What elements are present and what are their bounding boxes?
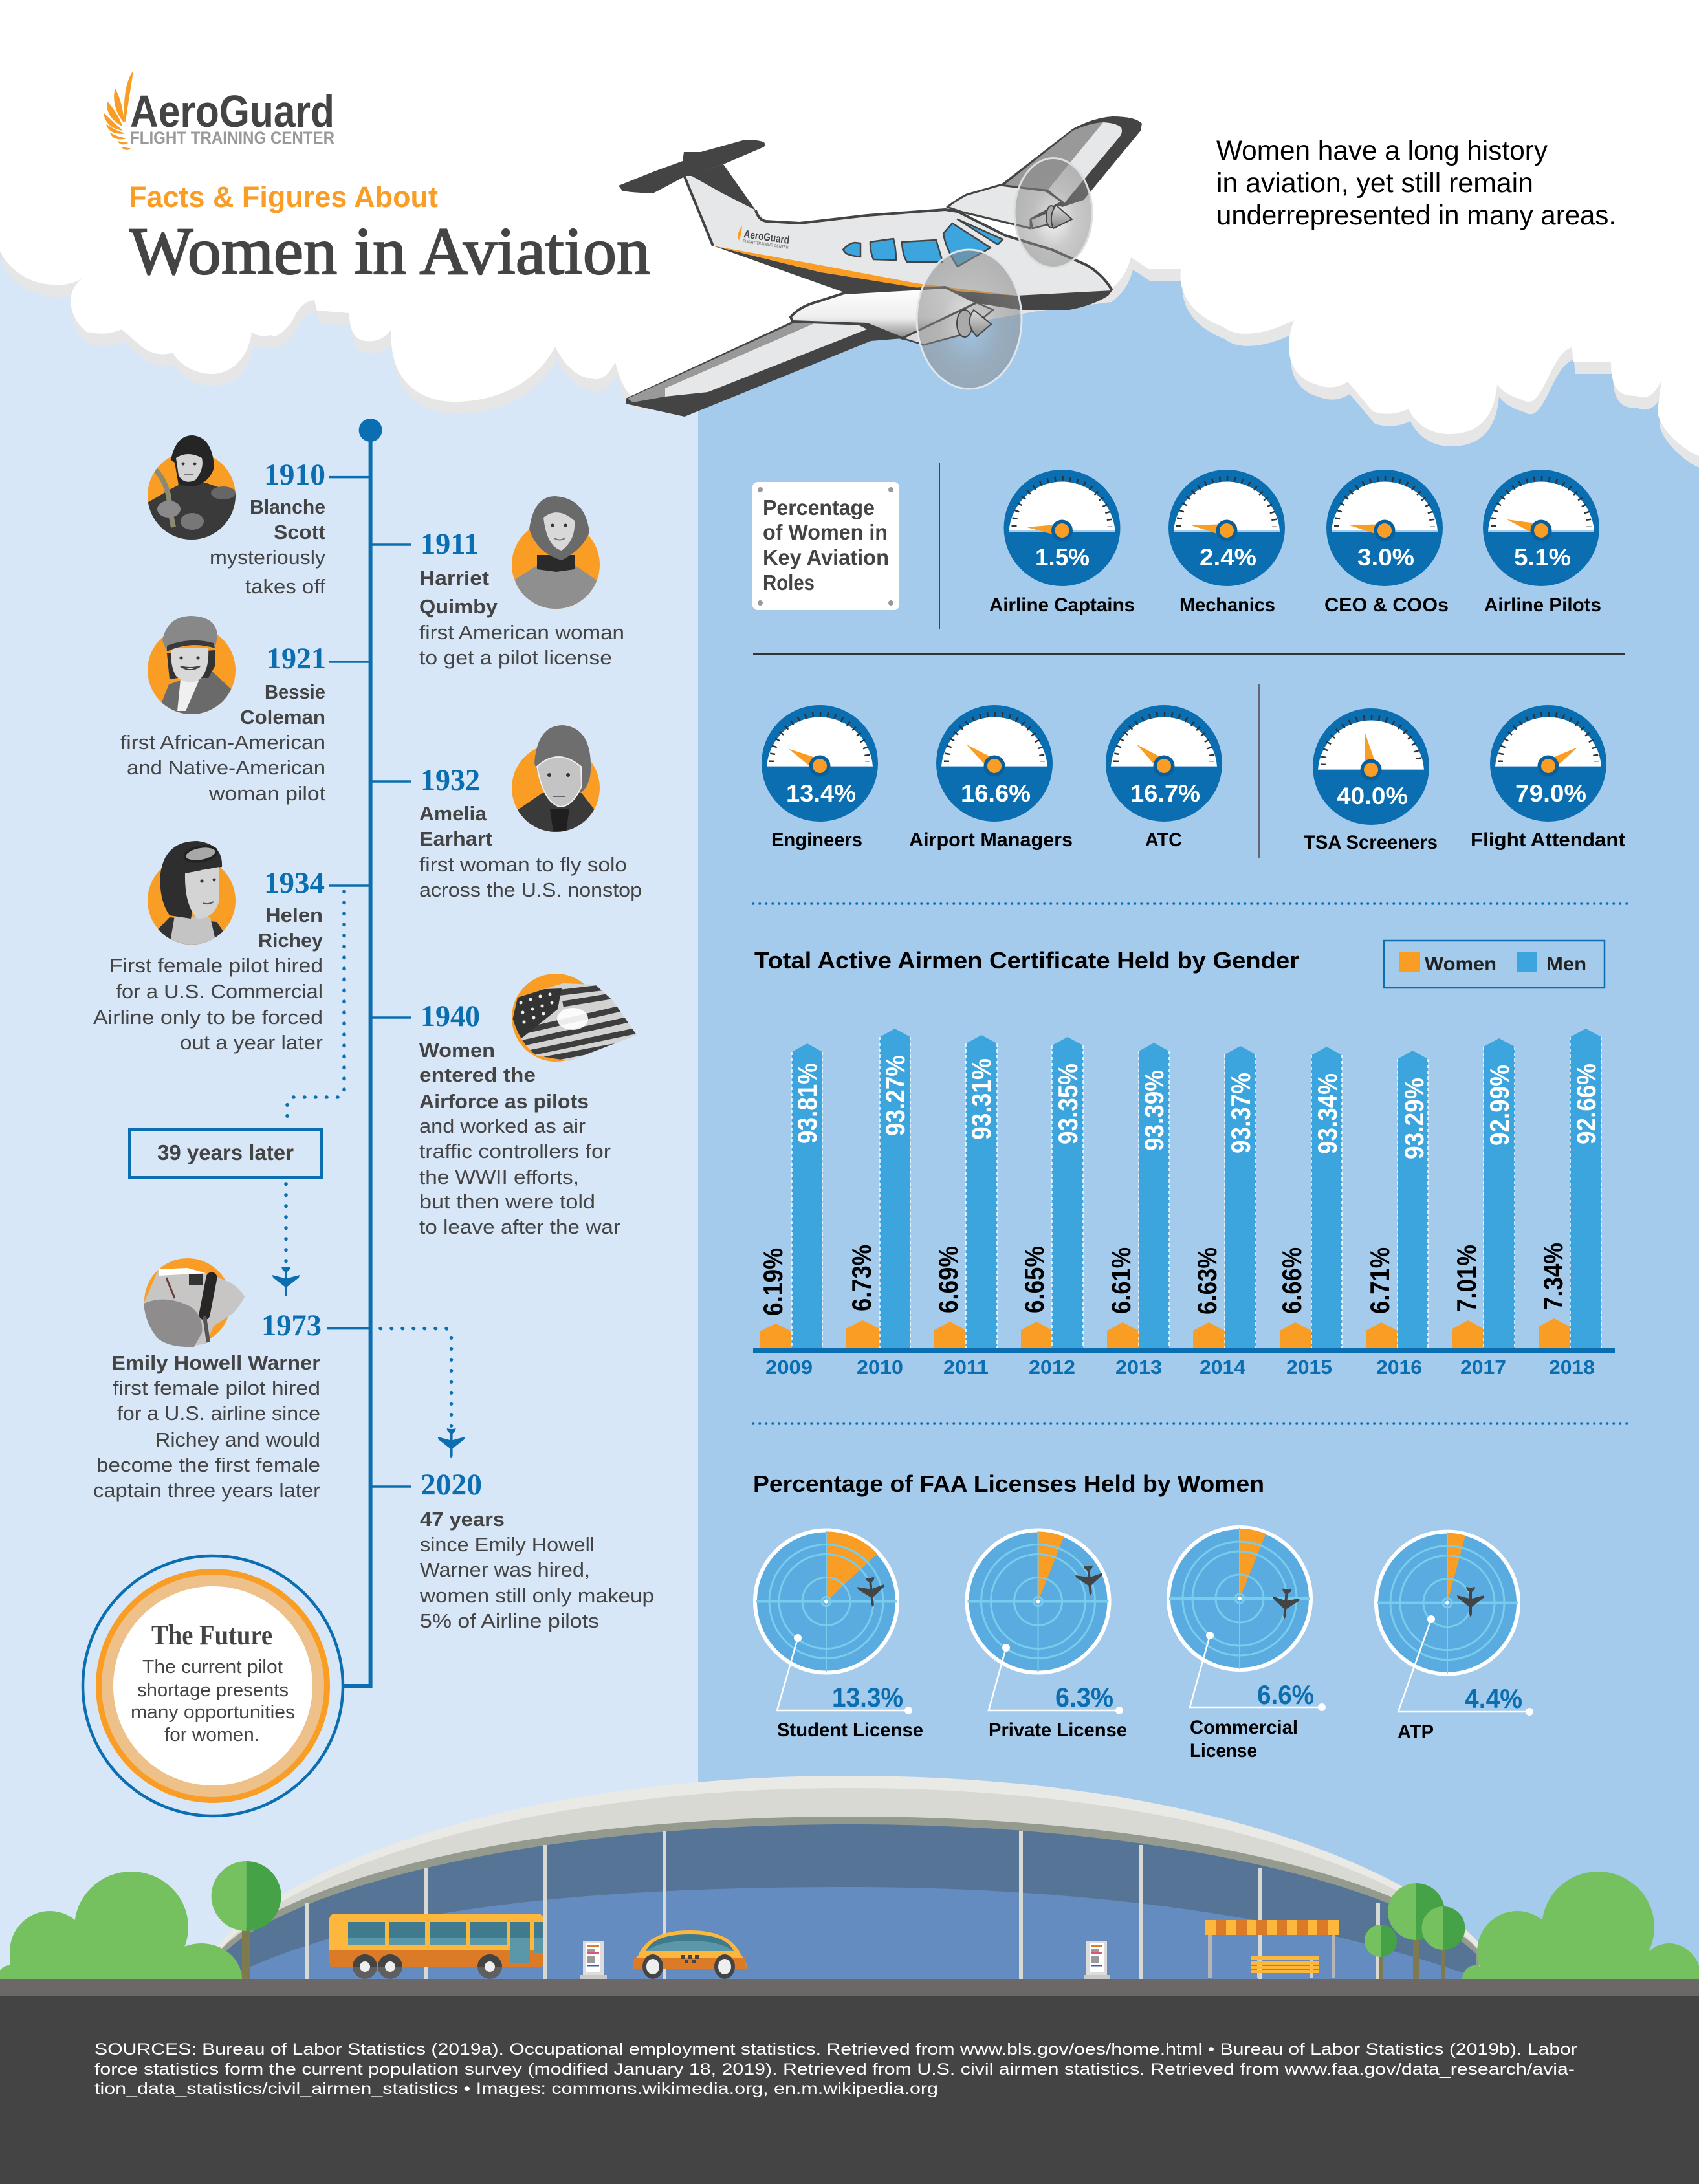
sky background: left panel (0, 0, 698, 1980)
gauge: Airline Pilots 5.1% (1483, 470, 1601, 616)
radar: Commercial License 6.6% (1168, 1527, 1326, 1762)
gauge: Engineers 13.4%: Engineers (771, 829, 862, 851)
timeline entry: 1921 Bessie Coleman: Bessie (265, 681, 325, 703)
timeline entry: 1940 Airforce: Women (419, 1039, 495, 1062)
timeline entry: 1973 Emily Howell Warner (93, 1258, 322, 1502)
bars: 2017: 92.99% (1484, 1065, 1515, 1146)
panel: percentage heading card: Roles (763, 571, 815, 595)
gauge: Mechanics 2.4% (1168, 470, 1285, 616)
timeline entry: 1940 Airforce: entered the (419, 1064, 536, 1086)
portrait: Bessie Coleman (148, 616, 236, 718)
bars: 2015: 93.34% (1312, 1073, 1343, 1154)
timeline entry: 1910 Blanche Scott: takes off (245, 575, 325, 598)
gauge: TSA Screeners 40.0%: 40.0% (1337, 783, 1408, 809)
callout: The Future (83, 1556, 343, 1816)
bars: 2014: 93.37% (1225, 1073, 1256, 1153)
timeline entry: 1973 Emily Howell Warner: Richey and would (155, 1428, 320, 1451)
bars: 2009: 6.19% (758, 1248, 788, 1316)
gauge: Flight Attendant 79.0%: Flight Attendant (1471, 829, 1625, 851)
bar chart: airmen certificates by gender (753, 1029, 1615, 1379)
bars: 2016: 2016 (1376, 1356, 1422, 1379)
icon: blue plane (272, 1267, 300, 1296)
bus stop shelter and bench (1205, 1920, 1339, 1978)
gauge: Airline Pilots 5.1%: Airline Pilots (1484, 595, 1601, 616)
radar: Student License 13.3%: Student License (777, 1720, 923, 1741)
radar: ATP 4.4%: 4.4% (1465, 1683, 1522, 1714)
cabin windows (843, 219, 1003, 267)
icon: orange wing feathers (104, 72, 133, 149)
trees and bushes: right (1365, 1872, 1699, 2016)
gauge: Mechanics 2.4%: 2.4% (1200, 544, 1256, 571)
taxi (633, 1930, 747, 1979)
fuselage outline (685, 177, 1112, 290)
bars: 2012: 6.65% (1019, 1246, 1049, 1313)
gauge: Flight Attendant 79.0% (1471, 705, 1625, 851)
airport terminal (214, 1776, 1485, 1980)
timeline entry: 1934 Helen Richey: Richey (258, 929, 323, 952)
fuselage (685, 176, 1112, 304)
timeline entry: 2020: 47 years (420, 1508, 505, 1531)
bars: 2018: 92.66% (1571, 1064, 1601, 1144)
callout: 39 years later (129, 1130, 322, 1177)
bars: 2012: 2012 (1029, 1356, 1075, 1379)
timeline connectors (327, 477, 411, 1487)
photo: American flag (508, 974, 641, 1064)
timeline entry: 2020: 2020 (421, 1468, 482, 1502)
portrait: Blanche Scott (146, 435, 237, 543)
bars: 2016: 93.29% (1399, 1078, 1429, 1159)
legend: Men (1546, 954, 1586, 975)
callout: The Future: The Future (151, 1619, 272, 1651)
timeline entry: 1932 Amelia Earhart (419, 725, 642, 901)
title: Women in Aviation (129, 214, 650, 289)
gauge: ATC 16.7% (1106, 705, 1222, 851)
callout: 39 years later: 39 years later (157, 1141, 294, 1164)
gauge: Airline Captains 1.5%: Airline Captains (989, 595, 1135, 616)
horizontal stabilizer (619, 140, 765, 193)
callout: The Future: many opportunities (131, 1702, 295, 1723)
intro text: in aviation, yet still remain (1216, 168, 1533, 199)
intro text (1216, 135, 1616, 231)
bars: 2015 (1277, 1047, 1343, 1379)
timeline entry: 1940 Airforce: to leave after the war (419, 1216, 620, 1238)
timeline entry: 1940 Airforce: and worked as air (419, 1115, 586, 1137)
timeline entry: 1934 Helen Richey: 1934 (264, 866, 325, 900)
gauge: Airport Managers 16.6%: Airport Managers (909, 829, 1073, 851)
gauge: CEO & COOs 3.0% (1324, 470, 1449, 616)
timeline entry: 2020: since Emily Howell (420, 1533, 595, 1556)
timeline entry: 2020: women still only makeup (419, 1584, 654, 1607)
bars: 2011: 6.69% (933, 1246, 963, 1313)
gauge: Airport Managers 16.6%: 16.6% (961, 780, 1031, 807)
bars: 2014: 6.63% (1192, 1247, 1222, 1315)
timeline entry: 1910 Blanche Scott: mysteriously (210, 546, 326, 569)
timeline entry: 1921 Bessie Coleman: and Native-American (127, 756, 325, 779)
bars: 2013: 6.61% (1106, 1247, 1136, 1314)
gauge: Flight Attendant 79.0%: 79.0% (1515, 780, 1586, 807)
gauge: Airport Managers 16.6% (909, 705, 1073, 851)
bars: 2018: 2018 (1549, 1356, 1595, 1379)
panel: percentage heading card: Key Aviation (763, 545, 889, 569)
timeline entry: 1934 Helen Richey (93, 841, 325, 1054)
timeline entry: 1921 Bessie Coleman: Coleman (240, 706, 325, 728)
timeline entry: 1932 Amelia Earhart: first woman to fly solo (419, 853, 627, 876)
far engine cowl (1031, 212, 1061, 228)
panel: percentage heading card (752, 482, 899, 610)
timeline entry: 1940 Airforce: 1940 (421, 999, 480, 1033)
timeline entry: 1940 Airforce: Airforce as pilots (419, 1090, 589, 1113)
panel: percentage heading card: Percentage (763, 496, 875, 519)
bars: 2009: 2009 (765, 1356, 813, 1379)
gauge: Airline Captains 1.5%: 1.5% (1035, 544, 1090, 571)
dotted path from 1934 to 39 years later (287, 891, 344, 1120)
gauge: ATC 16.7%: 16.7% (1130, 780, 1200, 807)
far engine nacelle (947, 185, 1062, 228)
timeline entry: 1910 Blanche Scott (146, 435, 326, 598)
icon: blue plane (438, 1428, 465, 1458)
gauge: CEO & COOs 3.0%: CEO & COOs (1324, 595, 1449, 616)
bars: 2009: 93.81% (792, 1063, 822, 1144)
intro text: underrepresented in many areas. (1216, 200, 1616, 231)
gauge: TSA Screeners 40.0% (1304, 708, 1438, 853)
dotted path from 1973 to 2020 (380, 1329, 452, 1427)
subtitle: Facts & Figures About (129, 180, 438, 213)
bars: 2014 (1192, 1046, 1256, 1379)
bars: 2012 (1019, 1037, 1083, 1379)
gauge: Engineers 13.4%: 13.4% (786, 780, 856, 807)
fuselage mini logo: AeroGuard (743, 228, 790, 246)
timeline entry: 1910 Blanche Scott: 1910 (264, 458, 325, 492)
bars: 2014: 2014 (1200, 1356, 1246, 1379)
bars: 2016 (1365, 1051, 1429, 1379)
timeline entry: 1934 Helen Richey: Airline only to be forced (93, 1006, 323, 1029)
radar: Commercial License 6.6%: 6.6% (1257, 1679, 1314, 1710)
legend: Women (1425, 954, 1496, 975)
timeline entry: 1932 Amelia Earhart: 1932 (421, 763, 480, 797)
far spinner (1046, 205, 1072, 228)
timeline entry: 1921 Bessie Coleman: woman pilot (208, 782, 325, 805)
bars: 2010: 6.73% (846, 1245, 877, 1311)
chart baseline (753, 1348, 1615, 1353)
dotted path down to 1973 (284, 1184, 288, 1263)
kiosk: right (1084, 1941, 1110, 1979)
fuselage orange stripe (713, 246, 1016, 296)
timeline entry: 2020: 5% of Airline pilots (420, 1610, 599, 1632)
timeline entry: 1973 Emily Howell Warner: Emily Howell Warner (111, 1351, 320, 1374)
timeline entry: 1911 Harriet Quimby: Harriet (419, 567, 489, 589)
gauge: ATC 16.7%: ATC (1145, 829, 1182, 851)
timeline entry: 1932 Amelia Earhart: Earhart (419, 827, 492, 850)
bars: 2011 (933, 1035, 997, 1379)
radar: Student License 13.3% (755, 1531, 923, 1741)
gauge: Mechanics 2.4%: Mechanics (1179, 595, 1275, 616)
timeline entry: 1910 Blanche Scott: Scott (274, 521, 325, 543)
footer band (0, 1996, 1699, 2184)
intro text: Women have a long history (1216, 135, 1548, 166)
ground road strip (0, 1979, 1699, 1996)
gauge: TSA Screeners 40.0%: TSA Screeners (1304, 832, 1438, 853)
radar: ATP 4.4%: ATP (1398, 1721, 1434, 1743)
bus (329, 1914, 543, 1979)
sources text: tion_data_statistics/civil_airmen_statistics • Images: commons.wikimedia.org, en.m.wikipedia.org (94, 2080, 938, 2098)
near wing (626, 322, 903, 417)
radar: Private License 6.3%: 6.3% (1055, 1682, 1113, 1712)
far propeller disc (1014, 158, 1092, 268)
timeline entry: 1940 Airforce: the WWII efforts, (419, 1166, 579, 1188)
sources text: SOURCES: Bureau of Labor Statistics (2019a). Occupational employment statistics. Retrieved from www.bls.gov/oes/home.html • Bureau of Labor Statistics (2019b). Labor (94, 2040, 1577, 2058)
timeline entry: 2020: Warner was hired, (420, 1558, 590, 1581)
radar: Commercial License 6.6%: Commercial (1190, 1717, 1298, 1738)
timeline entry: 1932 Amelia Earhart: Amelia (419, 802, 487, 825)
callout: The Future: The current pilot (142, 1657, 283, 1677)
timeline entry: 1911 Harriet Quimby: to get a pilot license (419, 646, 612, 669)
timeline entry: 1940 Airforce (419, 974, 641, 1238)
radar heading: Percentage of FAA Licenses Held by Women (753, 1470, 1264, 1497)
near engine cowl (903, 303, 993, 345)
bars: 2009 (758, 1043, 822, 1379)
radar: ATP 4.4% (1376, 1532, 1533, 1743)
near engine nacelle (791, 287, 977, 338)
timeline entry: 1973 Emily Howell Warner: captain three years later (93, 1479, 320, 1502)
callout: The Future: for women. (164, 1725, 259, 1745)
panel: percentage heading card: of Women in (763, 520, 888, 544)
timeline entry: 1973 Emily Howell Warner: 1973 (261, 1309, 322, 1342)
gauge: CEO & COOs 3.0%: 3.0% (1357, 544, 1414, 571)
gauge: Airline Pilots 5.1%: 5.1% (1514, 544, 1571, 571)
portrait: Harriet Quimby (512, 496, 600, 611)
chart heading: Total Active Airmen Certificate Held by Gender (754, 947, 1299, 974)
timeline entry: 1940 Airforce: but then were told (419, 1190, 595, 1213)
timeline entry: 1934 Helen Richey: Helen (265, 904, 323, 926)
near spinner (957, 310, 991, 337)
bars: 2018: 7.34% (1538, 1243, 1568, 1310)
legend (1384, 941, 1605, 988)
timeline entry: 1934 Helen Richey: First female pilot hired (109, 954, 323, 977)
sources text (94, 2040, 1577, 2098)
illustration: twin-engine airplane (619, 116, 1142, 417)
bars: 2010 (846, 1029, 910, 1379)
bars: 2015: 2015 (1286, 1356, 1332, 1379)
callout: The Future: shortage presents (137, 1680, 289, 1701)
timeline entry: 1911 Harriet Quimby: Quimby (419, 595, 498, 618)
timeline entry: 1911 Harriet Quimby (419, 496, 624, 669)
timeline entry: 1911 Harriet Quimby: 1911 (421, 527, 479, 561)
fuselage mini logo (738, 226, 790, 250)
portrait: Helen Richey (148, 841, 236, 948)
timeline entry: 1934 Helen Richey: for a U.S. Commercial (116, 980, 323, 1003)
fuselage mini logo: FLIGHT TRAINING CENTER (743, 239, 789, 250)
gauge: Engineers 13.4% (762, 705, 878, 851)
timeline entry: 1921 Bessie Coleman (120, 616, 326, 805)
bars: 2013 (1106, 1043, 1169, 1379)
timeline entry: 1921 Bessie Coleman: 1921 (267, 642, 326, 675)
timeline entry: 1910 Blanche Scott: Blanche (250, 496, 325, 518)
bars: 2010: 2010 (857, 1356, 903, 1379)
sky background: right panel (698, 0, 1699, 1980)
timeline entry: 1921 Bessie Coleman: first African-American (120, 731, 325, 754)
bars: 2016: 6.71% (1365, 1247, 1395, 1314)
timeline entry: 1973 Emily Howell Warner: first female pilot hired (113, 1377, 320, 1399)
radar: Student License 13.3%: 13.3% (832, 1682, 903, 1712)
bars: 2018 (1538, 1029, 1601, 1379)
timeline entry: 1973 Emily Howell Warner: become the first female (96, 1454, 320, 1476)
bars: 2010: 93.27% (880, 1055, 910, 1136)
radar: Commercial License 6.6%: License (1190, 1740, 1257, 1762)
bars: 2015: 6.66% (1277, 1247, 1307, 1314)
sources text: force statistics form the current population survey (modified January 18, 2019). Retrieved from U.S. civil airmen statistics. Retrieved from www.faa.gov/data_research/avia- (94, 2060, 1575, 2079)
far wing (1000, 116, 1142, 207)
radar: Private License 6.3% (967, 1531, 1127, 1741)
logo: AeroGuard Flight Training Center: FLIGHT TRAINING CENTER (130, 128, 334, 147)
logo: AeroGuard Flight Training Center (104, 72, 334, 149)
bars: 2017 (1451, 1038, 1515, 1379)
gauge: Airline Captains 1.5% (989, 470, 1135, 616)
bars: 2017: 7.01% (1451, 1245, 1482, 1312)
logo: AeroGuard Flight Training Center: AeroGuard (130, 86, 334, 136)
trees and bushes: left (0, 1861, 281, 2016)
cloud shadow (2, 12, 1699, 468)
kiosk: left (580, 1941, 607, 1979)
timeline entry: 2020 (419, 1468, 654, 1632)
radar: Private License 6.3%: Private License (989, 1720, 1127, 1741)
portrait: Amelia Earhart (512, 725, 600, 835)
bars: 2013: 93.39% (1139, 1070, 1169, 1151)
timeline entry: 1911 Harriet Quimby: first American woman (419, 621, 624, 644)
timeline entry: 1932 Amelia Earhart: across the U.S. nonstop (419, 879, 642, 901)
tail fin dark band (686, 164, 756, 210)
bars: 2013: 2013 (1115, 1356, 1162, 1379)
bars: 2011: 2011 (943, 1356, 989, 1379)
bars: 2011: 93.31% (966, 1058, 996, 1140)
fuselage dark belly (713, 246, 1112, 310)
timeline entry: 1940 Airforce: traffic controllers for (419, 1140, 611, 1163)
white header cloud (0, 0, 1699, 456)
timeline entry: 1973 Emily Howell Warner: for a U.S. airline since (117, 1402, 320, 1425)
bars: 2012: 93.35% (1053, 1064, 1083, 1144)
timeline entry: 1934 Helen Richey: out a year later (180, 1031, 323, 1054)
photo: vintage airplane (144, 1258, 245, 1347)
near propeller disc (917, 250, 1022, 389)
bars: 2017: 2017 (1460, 1356, 1506, 1379)
timeline: main vertical line (343, 419, 382, 1686)
